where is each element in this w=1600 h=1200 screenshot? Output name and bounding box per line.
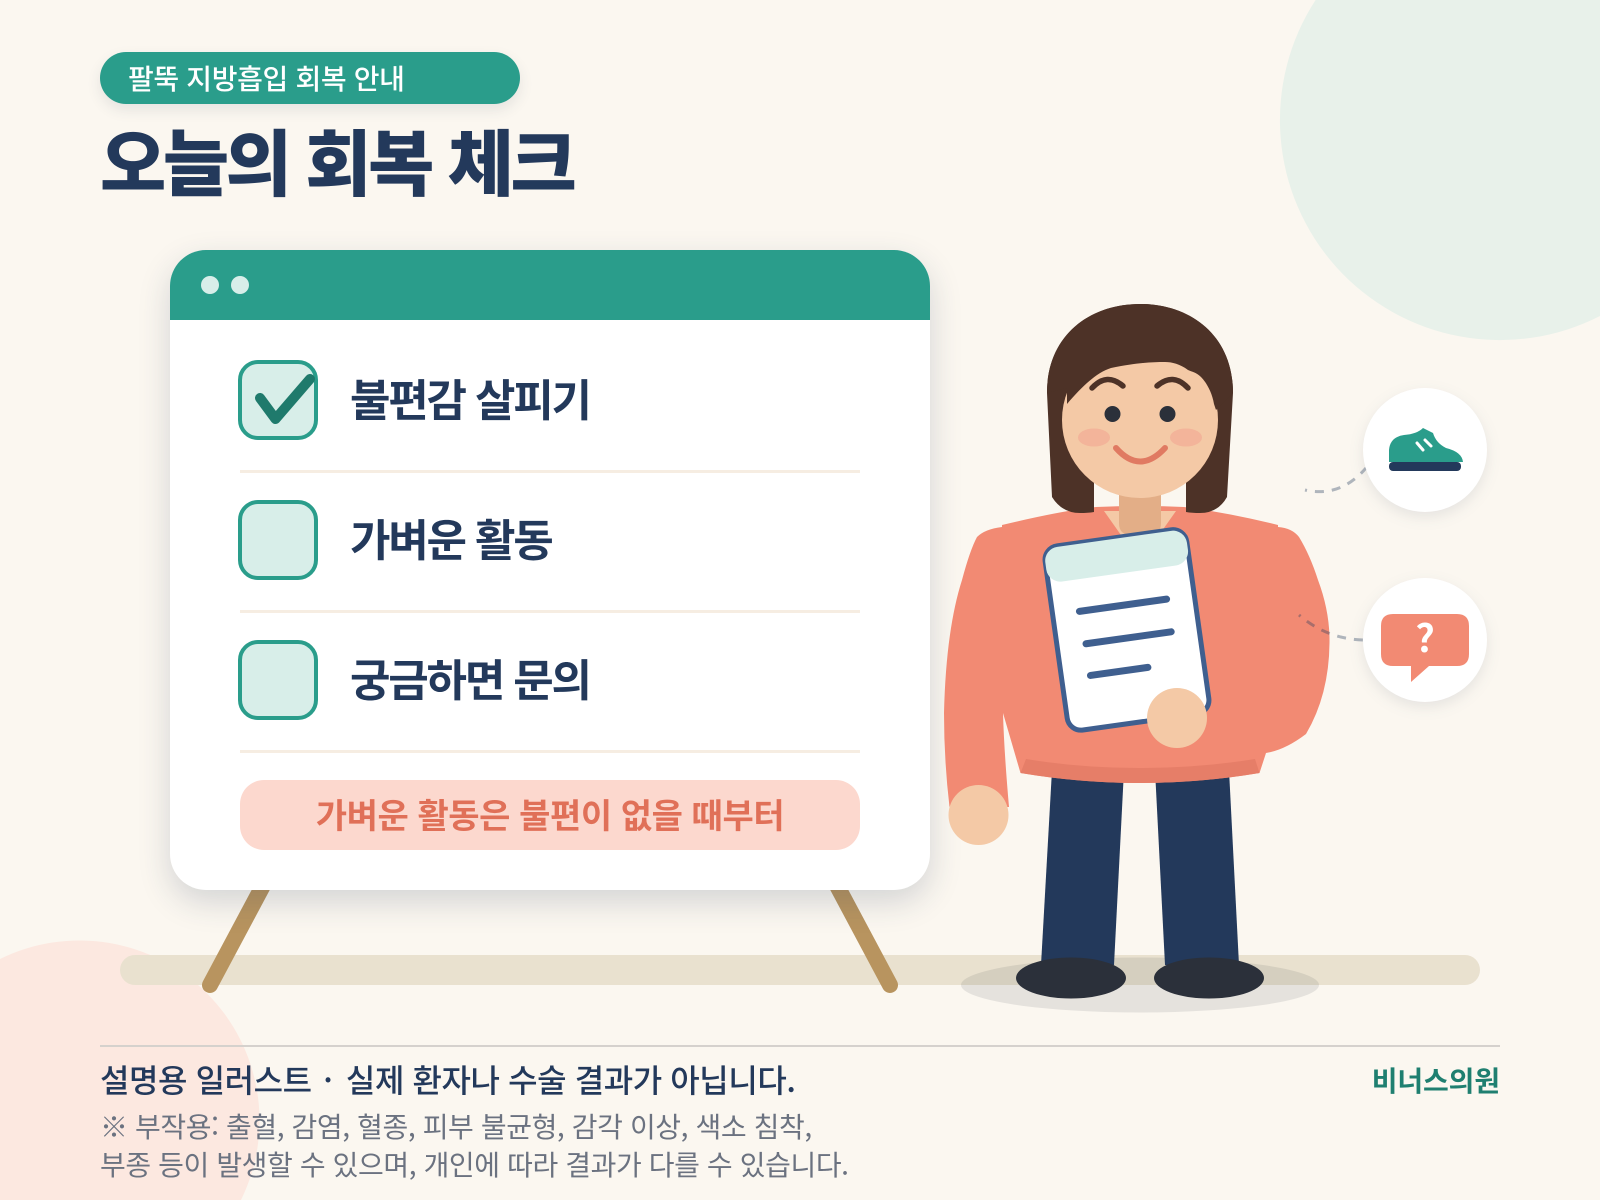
fringe	[1047, 304, 1233, 410]
ground shadow	[961, 958, 1319, 1012]
legs	[1041, 770, 1239, 965]
clipboard	[1043, 528, 1211, 732]
board header bar	[170, 250, 930, 320]
icon: question speech bubble badge: ?	[1415, 608, 1435, 663]
footer rule	[100, 1045, 1500, 1047]
callout: note bar: 가벼운 활동은 불편이 없을 때부터	[316, 789, 784, 838]
badge: top pill: 팔뚝 지방흡입 회복 안내	[128, 58, 405, 98]
right hand	[1147, 688, 1207, 748]
item 1 label: 불편감 살피기	[350, 365, 590, 429]
cheeks	[1078, 428, 1202, 446]
item 3 label: 궁금하면 문의	[350, 645, 590, 709]
mouth	[1116, 448, 1165, 462]
back hair	[1047, 304, 1233, 513]
eyes	[1104, 406, 1176, 422]
icon: shoe badge	[1363, 388, 1487, 512]
collar	[1104, 511, 1176, 562]
face	[1062, 342, 1218, 498]
callout: note bar	[240, 780, 860, 850]
title: 오늘의 회복 체크	[100, 106, 573, 211]
checkbox 3	[238, 640, 318, 720]
dashed connectors	[1299, 468, 1366, 640]
clinic brand: 비너스의원	[1372, 1060, 1500, 1100]
side effects note: ※ 부작용: 출혈, 감염, 혈종, 피부 불균형, 감각 이상, 색소 침착,	[100, 1106, 812, 1146]
neck	[1119, 480, 1161, 535]
side effects note: 부종 등이 발생할 수 있으며, 개인에 따라 결과가 다를 수 있습니다.	[100, 1144, 849, 1184]
item 2 label: 가벼운 활동	[350, 505, 552, 569]
checkbox 1 checked	[238, 360, 318, 440]
footer disclaimer heading: 설명용 일러스트 · 실제 환자나 수술 결과가 아닙니다.	[100, 1056, 796, 1102]
checkbox 2	[238, 500, 318, 580]
left hand	[948, 785, 1008, 845]
shoes	[1016, 958, 1264, 998]
side effects note	[100, 1106, 849, 1184]
icon: question speech bubble badge	[1363, 578, 1487, 702]
sweater	[944, 506, 1330, 807]
badge: top pill	[100, 52, 520, 104]
eyebrows	[1092, 379, 1188, 388]
panel: checklist board	[170, 250, 930, 890]
